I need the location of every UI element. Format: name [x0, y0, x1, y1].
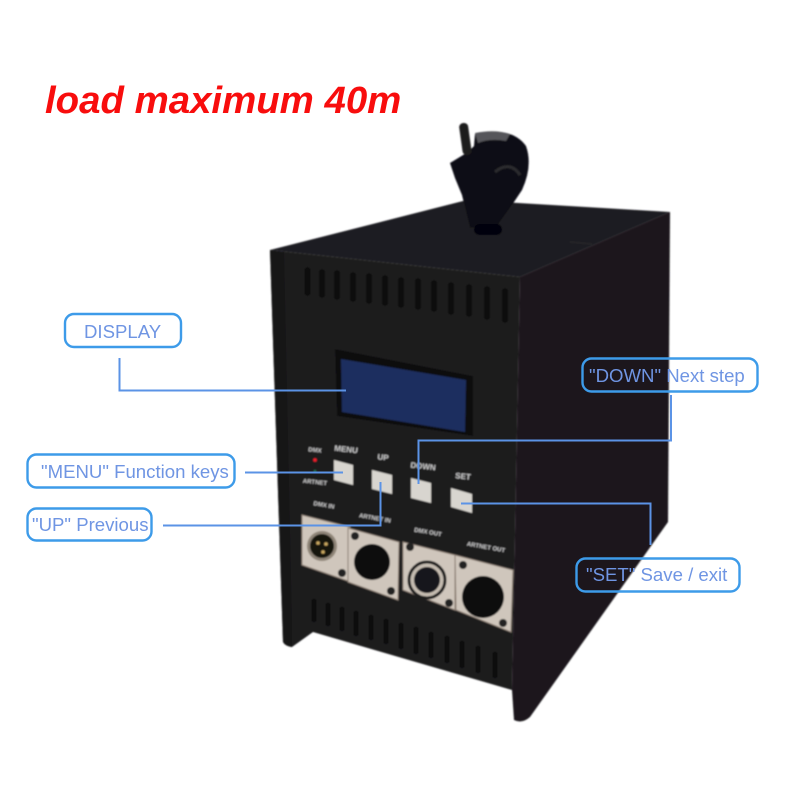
button: SET	[451, 488, 472, 513]
callout: UP	[28, 482, 380, 540]
callout: SET: "SET" Save / exit	[586, 564, 728, 585]
clamp	[450, 122, 529, 235]
connector: DMX OUT	[403, 542, 455, 610]
top panel	[270, 200, 670, 277]
connector: ARTNET IN	[348, 528, 399, 600]
callout: DISPLAY	[65, 314, 346, 390]
panel labels: SET	[455, 471, 471, 482]
callout: DOWN	[418, 358, 758, 484]
panel labels: UP	[377, 452, 390, 463]
connector: DMX IN	[302, 515, 350, 581]
panel labels: DMX IN	[313, 501, 335, 511]
callout: DISPLAY: DISPLAY	[84, 321, 161, 342]
panel labels: DMX	[308, 447, 322, 455]
panel labels: DOWN	[410, 461, 436, 472]
callout: UP: "UP" Previous	[32, 514, 149, 535]
status LEDs	[313, 458, 317, 472]
panel labels: DMX OUT	[414, 528, 442, 538]
callout: MENU: "MENU" Function keys	[41, 461, 229, 482]
right side panel	[512, 212, 670, 721]
button: MENU	[334, 460, 353, 485]
front panel	[270, 250, 520, 690]
top panel seam	[570, 242, 592, 244]
display screen	[335, 349, 473, 436]
panel labels	[302, 444, 506, 554]
panel labels: MENU	[334, 444, 358, 455]
connector: ARTNET OUT	[455, 555, 513, 632]
callout: DOWN: "DOWN" Next step	[589, 365, 745, 386]
left flange shade	[270, 250, 292, 647]
top vents	[308, 270, 505, 320]
device: controller box	[270, 122, 670, 721]
panel labels: ARTNET	[302, 479, 328, 487]
panel labels: ARTNET OUT	[466, 542, 506, 554]
callout: MENU	[28, 454, 343, 488]
button: UP	[372, 470, 392, 494]
panel labels: ARTNET IN	[359, 513, 391, 525]
title: load maximum 40m	[45, 79, 401, 122]
callout: SET	[461, 504, 740, 592]
bottom vents	[314, 601, 495, 676]
button: DOWN	[411, 478, 431, 503]
